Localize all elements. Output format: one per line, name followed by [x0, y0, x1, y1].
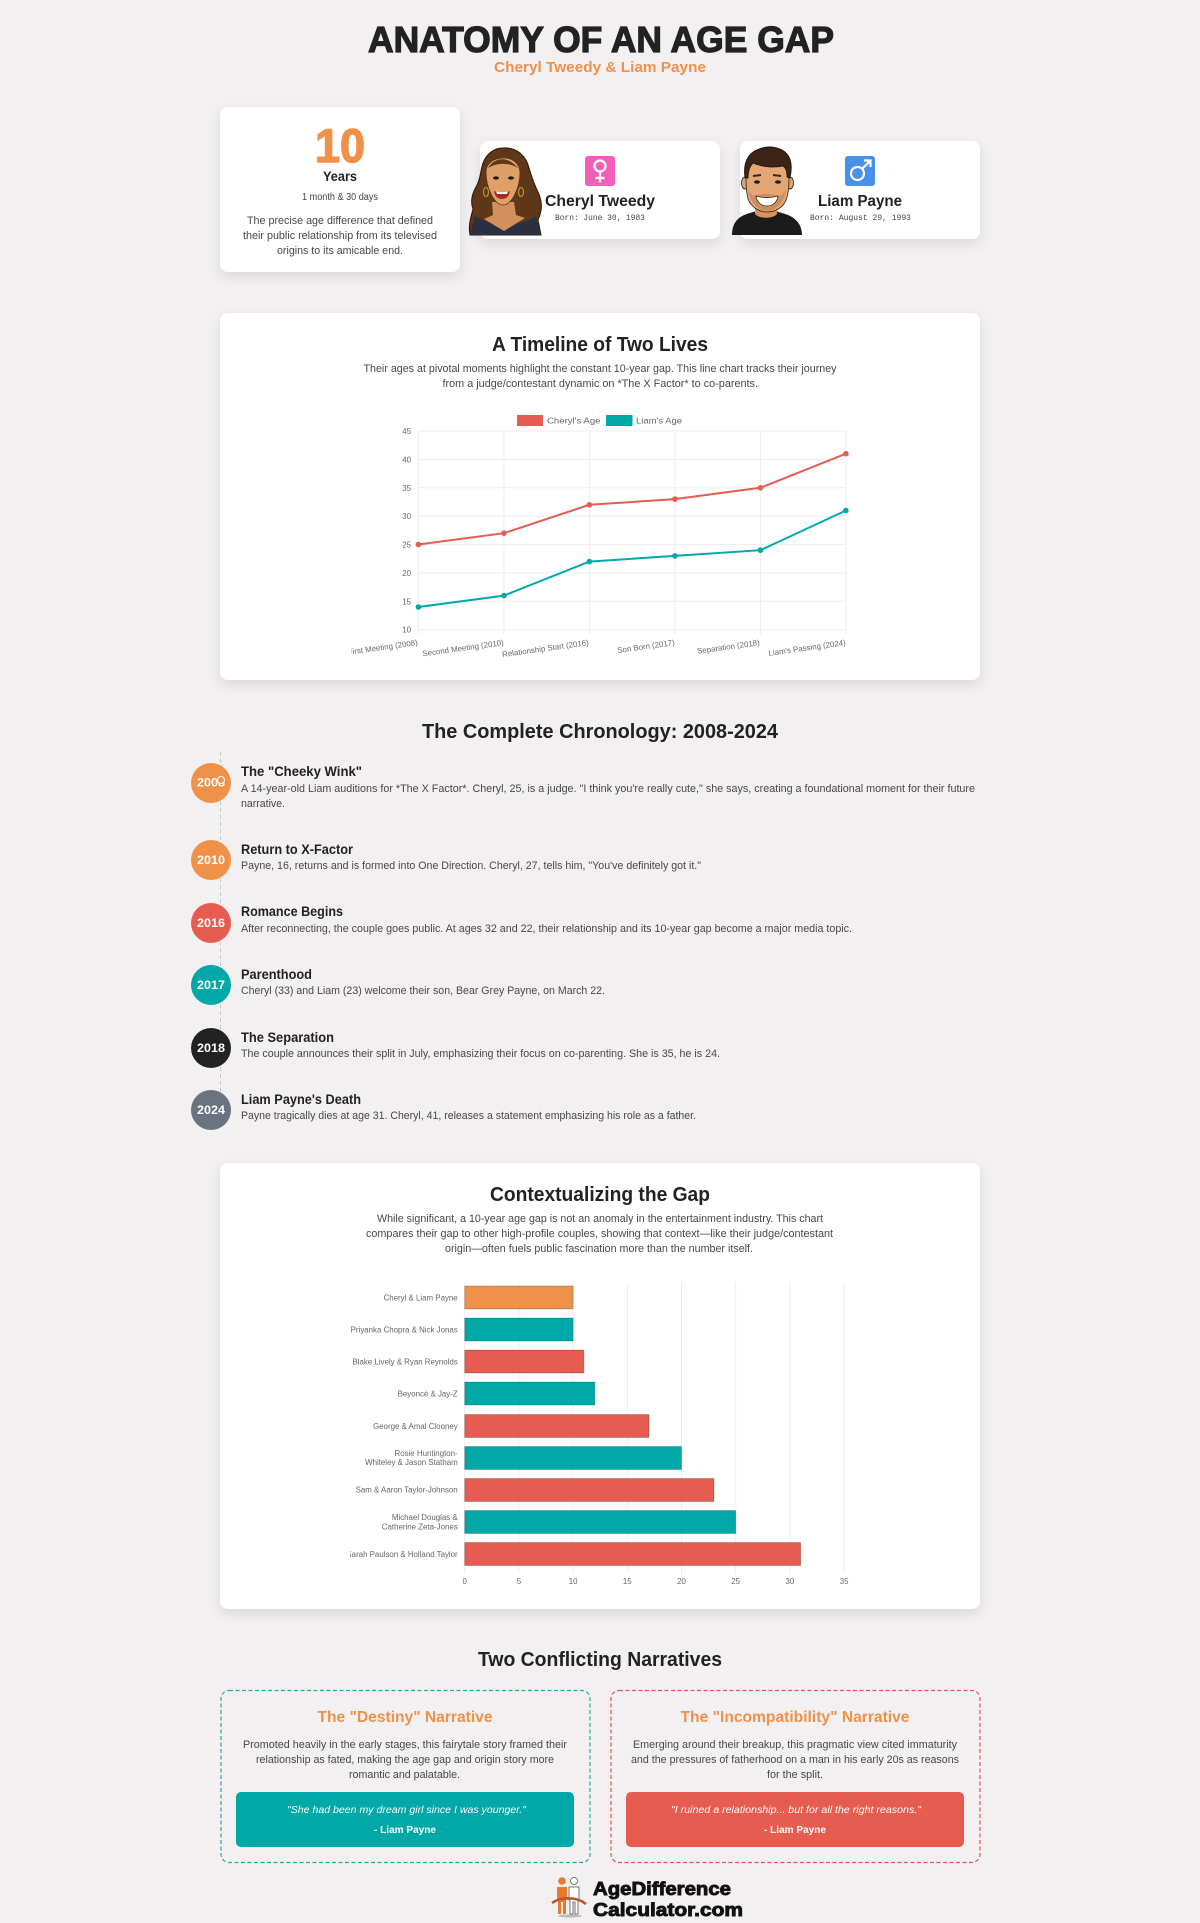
bar labels: Catherine Zeta-Jones: [382, 1522, 458, 1532]
panel: incompatibility narrative: [611, 1690, 980, 1862]
bar chart: [346, 1282, 849, 1586]
event: 2016: After reconnecting, the couple goes public. At ages 32 and 22, their relationship and its 10-year gap become a major media topic.: [241, 923, 852, 935]
bar labels: Cheryl & Liam Payne: [384, 1294, 458, 1302]
quote box: - Liam Payne: [764, 1824, 826, 1836]
description: The precise age difference that defined: [247, 215, 433, 227]
event: 2018: [191, 1028, 720, 1068]
x axis labels: 0: [463, 1577, 468, 1586]
series: Liam's age: [416, 508, 849, 610]
x axis labels: Relationship Start (2016): [502, 638, 590, 659]
event: 2018: The couple announces their split in July, emphasizing their focus on co-parenting. She is 35, he is 24.: [241, 1048, 720, 1060]
x axis labels: 20: [677, 1577, 686, 1586]
event: 2024: Liam Payne's Death: [241, 1092, 361, 1107]
narrative title: The "Incompatibility" Narrative: [680, 1709, 910, 1726]
icon: two people: [552, 1877, 586, 1918]
x axis labels: 35: [840, 1577, 849, 1586]
bar labels: [346, 1294, 458, 1559]
event: 2016: Romance Begins: [241, 904, 343, 919]
event: 2008: 2008: [197, 776, 225, 790]
name: Liam Payne: [818, 193, 902, 210]
x axis labels: [351, 640, 846, 657]
bars: [465, 1286, 801, 1566]
y axis labels: 40: [402, 455, 412, 464]
icon: female symbol: [585, 156, 615, 186]
description: [243, 215, 437, 257]
bar labels: Rosie Huntington-: [395, 1449, 458, 1458]
narrative text: and the pressures of fatherhood on a man in his early 20s as reasons: [631, 1754, 960, 1766]
event: 2018: The Separation: [241, 1030, 334, 1045]
unit: Years: [323, 168, 357, 184]
quote box: - Liam Payne: [374, 1824, 436, 1836]
quote box: "She had been my dream girl since I was younger.": [287, 1804, 527, 1816]
legend: [517, 415, 683, 426]
event: 2024: Payne tragically dies at age 31. Cheryl, 41, releases a statement emphasizing his role as a father.: [241, 1110, 696, 1122]
description: from a judge/contestant dynamic on *The X Factor* to co-parents.: [442, 378, 758, 390]
heading: chronology: The Complete Chronology: 2008-2024: [422, 721, 779, 743]
event: 2017: Cheryl (33) and Liam (23) welcome their son, Bear Grey Payne, on March 22.: [241, 985, 605, 997]
bar labels: Sam & Aaron Taylor-Johnson: [356, 1486, 458, 1494]
description: [364, 363, 837, 390]
legend: Cheryl's Age: [547, 416, 601, 426]
panel: age gap stat: [220, 107, 460, 272]
description: While significant, a 10-year age gap is not an anomaly in the entertainment industry. This chart: [377, 1213, 823, 1225]
quote box: "I ruined a relationship... but for all the right reasons.": [671, 1804, 922, 1816]
event: 2010: Payne, 16, returns and is formed into One Direction. Cheryl, 27, tells him, "You've definitely got it.": [241, 860, 701, 872]
birth date: Born: June 30, 1983: [555, 214, 645, 223]
event: 2024: [191, 1090, 696, 1130]
quote box: [236, 1792, 574, 1847]
x axis labels: Second Meeting (2010): [422, 638, 505, 658]
panel: Cheryl Tweedy: [469, 141, 720, 239]
narrative title: The "Destiny" Narrative: [318, 1709, 493, 1726]
y axis labels: 35: [402, 484, 412, 493]
description: Their ages at pivotal moments highlight the constant 10-year gap. This line chart tracks their journey: [364, 363, 837, 375]
bar labels: Blake Lively & Ryan Reynolds: [352, 1358, 458, 1366]
narrative text: for the split.: [767, 1769, 823, 1781]
icon: Cheryl avatar: [469, 148, 541, 235]
bar labels: George & Amal Clooney: [373, 1422, 458, 1431]
timeline: chronology: [191, 752, 975, 1130]
bar labels: Sarah Paulson & Holland Taylor: [346, 1550, 458, 1559]
narrative text: [243, 1739, 567, 1781]
quote box: [626, 1792, 964, 1847]
event: 2017: [191, 965, 605, 1005]
event: 2008: A 14-year-old Liam auditions for *The X Factor*. Cheryl, 25, is a judge. "I think you're really cute," she says, creating a foundational moment for their future: [241, 783, 975, 795]
y axis labels: 15: [402, 597, 412, 606]
narrative text: Emerging around their breakup, this pragmatic view cited immaturity: [633, 1739, 958, 1751]
wordmark: AgeDifference: [593, 1878, 731, 1899]
event: 2010: Return to X-Factor: [241, 842, 354, 857]
icon: Liam avatar: [732, 147, 802, 235]
narrative text: romantic and palatable.: [349, 1769, 460, 1781]
y axis labels: 20: [402, 569, 412, 578]
x axis labels: First Meeting (2008): [347, 638, 419, 657]
legend: Liam's Age: [636, 416, 683, 426]
x axis labels: Liam's Passing (2024): [768, 638, 847, 658]
name: Cheryl Tweedy: [545, 193, 655, 210]
description: origins to its amicable end.: [277, 245, 403, 257]
event: 2018: 2018: [197, 1041, 225, 1055]
heading: A Timeline of Two Lives: [492, 334, 708, 356]
line chart: [347, 415, 849, 659]
description: origin—often fuels public fascination more than the number itself.: [445, 1243, 753, 1255]
event: 2008: [191, 763, 975, 810]
description: their public relationship from its televised: [243, 230, 437, 242]
panel: destiny narrative: [221, 1690, 590, 1862]
footer logo: [552, 1877, 743, 1920]
y axis labels: 45: [402, 427, 412, 436]
series: Cheryl's age: [416, 451, 849, 547]
event: 2024: 2024: [197, 1103, 225, 1117]
bar labels: Priyanka Chopra & Nick Jonas: [351, 1326, 458, 1334]
big number: 10: [315, 119, 365, 172]
narrative text: Promoted heavily in the early stages, this fairytale story framed their: [243, 1739, 567, 1751]
bar labels: Beyoncé & Jay-Z: [398, 1390, 458, 1398]
y axis labels: 30: [402, 512, 412, 521]
description: compares their gap to other high-profile couples, showing that context—like their judge/contestant: [366, 1228, 833, 1240]
narrative text: relationship as fated, making the age gap and origin story more: [256, 1754, 554, 1766]
y axis labels: [402, 427, 412, 635]
x axis labels: [463, 1577, 849, 1586]
x axis labels: Son Born (2017): [617, 638, 676, 655]
event: 2016: 2016: [197, 916, 225, 930]
event: 2008: narrative.: [241, 798, 285, 810]
event: 2008: The "Cheeky Wink": [241, 764, 362, 779]
heading: narratives: Two Conflicting Narratives: [478, 1649, 722, 1671]
event: 2010: 2010: [197, 853, 225, 867]
event: 2016: [191, 903, 852, 943]
bar labels: Michael Douglas &: [392, 1513, 458, 1522]
panel: timeline of two lives: [220, 313, 980, 680]
bar labels: Whiteley & Jason Statham: [365, 1458, 458, 1467]
event: 2017: Parenthood: [241, 967, 312, 982]
heading: Contextualizing the Gap: [490, 1184, 710, 1206]
x axis labels: Separation (2018): [696, 638, 761, 656]
narrative text: [631, 1739, 960, 1781]
event: 2010: [191, 840, 701, 880]
y axis labels: 25: [402, 541, 412, 550]
x axis labels: 10: [569, 1577, 578, 1586]
x axis labels: 30: [786, 1577, 795, 1586]
icon: male symbol: [845, 156, 875, 186]
event: 2017: 2017: [197, 978, 225, 992]
panel: Liam Payne: [732, 141, 980, 239]
x axis labels: 5: [517, 1577, 522, 1586]
precise difference: 1 month & 30 days: [302, 192, 378, 203]
title: ANATOMY OF AN AGE GAP: [368, 19, 834, 60]
x axis labels: 15: [623, 1577, 632, 1586]
birth date: Born: August 29, 1993: [810, 214, 911, 223]
subtitle: Cheryl Tweedy & Liam Payne: [494, 59, 706, 76]
wordmark: Calculator.com: [593, 1899, 743, 1920]
y axis labels: 10: [402, 626, 412, 635]
x axis labels: 25: [731, 1577, 741, 1586]
panel: contextualizing the gap: [220, 1163, 980, 1609]
wordmark: [593, 1878, 743, 1920]
description: [366, 1213, 833, 1255]
